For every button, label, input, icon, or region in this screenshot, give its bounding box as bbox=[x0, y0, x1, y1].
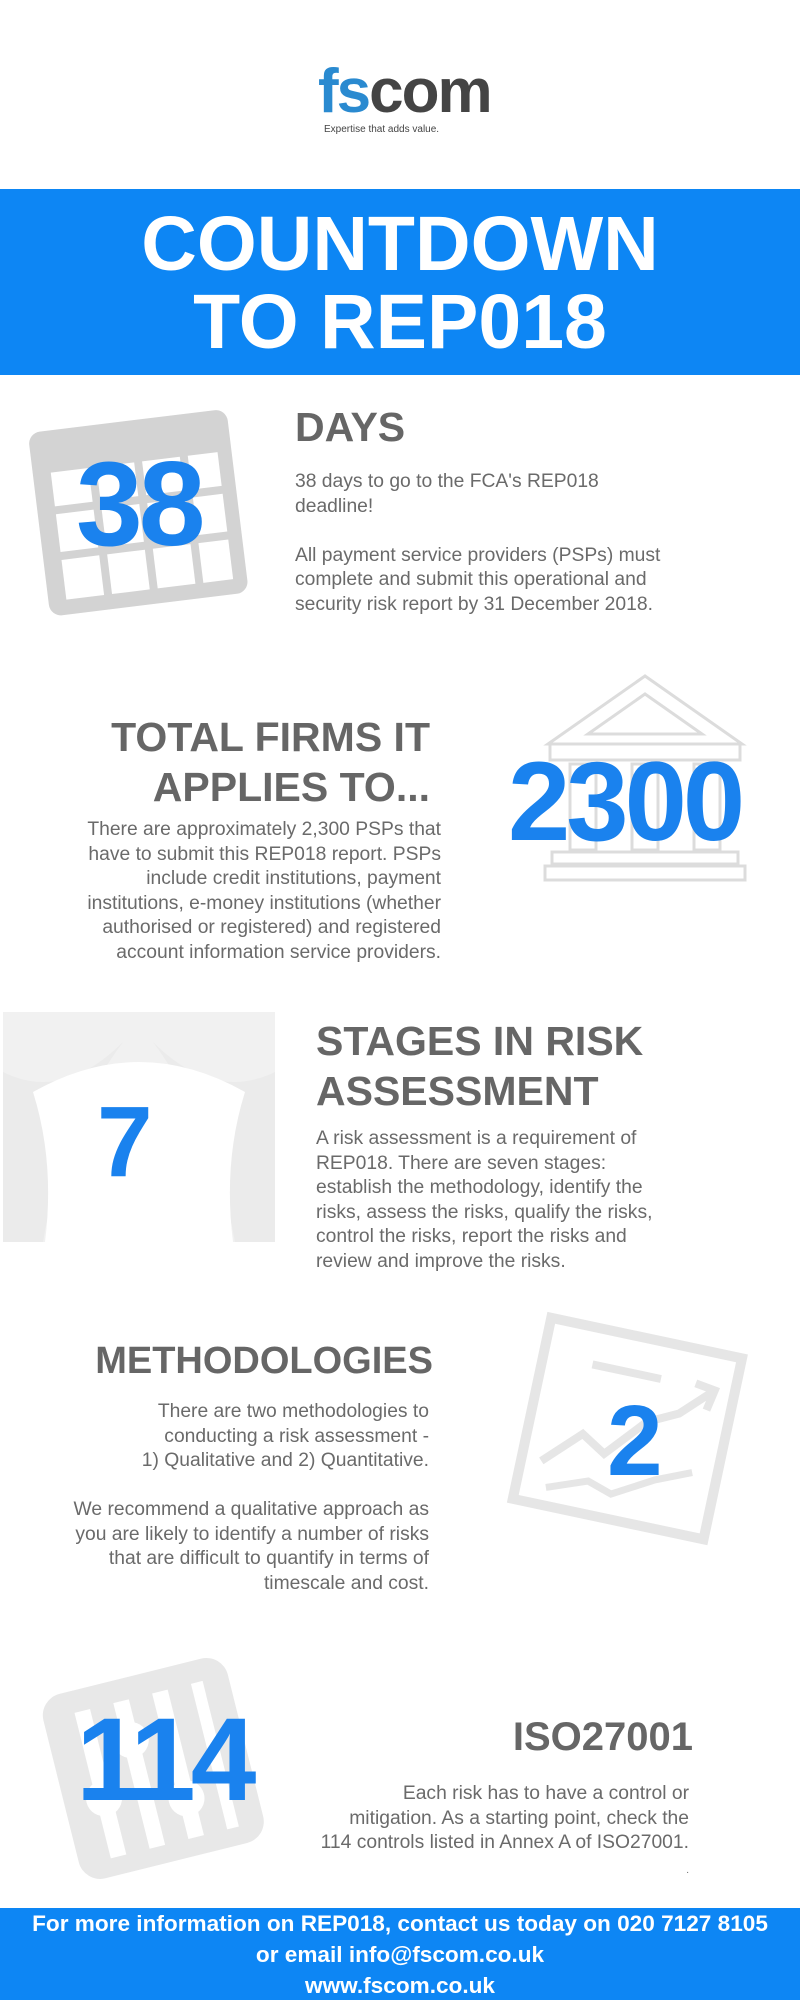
text: total firms bbox=[87, 819, 441, 962]
footer contact banner: www.fscom.co.uk bbox=[305, 1973, 495, 1998]
text: days: deadline! bbox=[295, 496, 373, 516]
text: methodologies bbox=[74, 1401, 429, 1594]
icon: chart with 2 bbox=[507, 1312, 748, 1546]
heading: methodologies: METHODOLOGIES bbox=[95, 1340, 433, 1382]
text: methodologies: 1) Qualitative and 2) Quantitative. bbox=[142, 1450, 429, 1471]
number 2300: 2300 bbox=[508, 739, 741, 864]
icon: sliders with 114 bbox=[42, 1658, 264, 1879]
number 114: 114 bbox=[76, 1694, 251, 1826]
text: stages: review and improve the risks. bbox=[316, 1250, 566, 1272]
text: total firms: include credit institutions, payment bbox=[146, 868, 441, 889]
text: iso27001: . bbox=[686, 1864, 689, 1876]
text: total firms: have to submit this REP018 report. PSPs bbox=[88, 844, 441, 864]
title banner: COUNTDOWN bbox=[141, 201, 659, 287]
text: stages: control the risks, report the risks and bbox=[316, 1226, 627, 1247]
text: iso27001: mitigation. As a starting point, check the bbox=[349, 1808, 689, 1828]
text: stages: risks, assess the risks, qualify the risks, bbox=[316, 1202, 652, 1222]
title banner bbox=[0, 189, 800, 375]
title banner: TO REP018 bbox=[193, 279, 607, 365]
heading: total firms bbox=[111, 714, 430, 810]
logo: Expertise that adds value. bbox=[324, 124, 439, 135]
text: methodologies: We recommend a qualitative approach as bbox=[74, 1499, 429, 1520]
text: stages bbox=[316, 1128, 652, 1272]
heading: stages: STAGES IN RISK bbox=[316, 1018, 643, 1064]
text: methodologies: you are likely to identify a number of risks bbox=[75, 1524, 429, 1544]
text: stages: REP018. There are seven stages: bbox=[316, 1152, 606, 1174]
text: days: complete and submit this operational and bbox=[295, 569, 647, 590]
icon: stage curtain with 7 bbox=[3, 1012, 275, 1242]
heading: stages: ASSESSMENT bbox=[316, 1068, 598, 1114]
text: methodologies: timescale and cost. bbox=[264, 1572, 429, 1594]
text: days bbox=[295, 471, 660, 614]
heading: stages bbox=[316, 1018, 643, 1114]
logo: fscom bbox=[318, 57, 491, 126]
icon: bank with 2300 bbox=[508, 674, 746, 882]
text: methodologies: conducting a risk assessment - bbox=[164, 1426, 429, 1446]
footer contact banner bbox=[0, 1908, 800, 2000]
text: total firms: institutions, e-money institutions (whether bbox=[87, 892, 441, 914]
text: iso27001: Each risk has to have a control or bbox=[403, 1783, 689, 1804]
text: total firms: There are approximately 2,300 PSPs that bbox=[87, 819, 441, 840]
heading: iso27001: ISO27001 bbox=[513, 1715, 693, 1759]
heading: days: DAYS bbox=[295, 404, 405, 450]
icon: calendar with 38 bbox=[29, 410, 248, 616]
text: days: All payment service providers (PSPs) must bbox=[295, 544, 660, 566]
heading: total firms: TOTAL FIRMS IT bbox=[111, 714, 430, 760]
text: methodologies: There are two methodologies to bbox=[158, 1401, 429, 1422]
footer contact banner: or email info@fscom.co.uk bbox=[256, 1942, 544, 1967]
text: stages: establish the methodology, identify the bbox=[316, 1177, 643, 1198]
number 38: 38 bbox=[76, 437, 201, 571]
number 7: 7 bbox=[97, 1086, 153, 1198]
heading: total firms: APPLIES TO... bbox=[153, 764, 430, 810]
text: stages: A risk assessment is a requirement of bbox=[316, 1128, 636, 1149]
text: iso27001: 114 controls listed in Annex A of ISO27001. bbox=[321, 1832, 689, 1853]
text: total firms: authorised or registered) and registered bbox=[102, 917, 441, 938]
text: iso27001 bbox=[321, 1783, 689, 1876]
text: methodologies: that are difficult to quantify in terms of bbox=[109, 1548, 429, 1569]
footer contact banner: For more information on REP018, contact us today on 020 7127 8105 bbox=[32, 1911, 768, 1936]
text: total firms: account information service providers. bbox=[116, 942, 441, 962]
text: days: security risk report by 31 December 2018. bbox=[295, 594, 653, 614]
number 2: 2 bbox=[607, 1385, 663, 1497]
text: days: 38 days to go to the FCA's REP018 bbox=[295, 471, 599, 492]
